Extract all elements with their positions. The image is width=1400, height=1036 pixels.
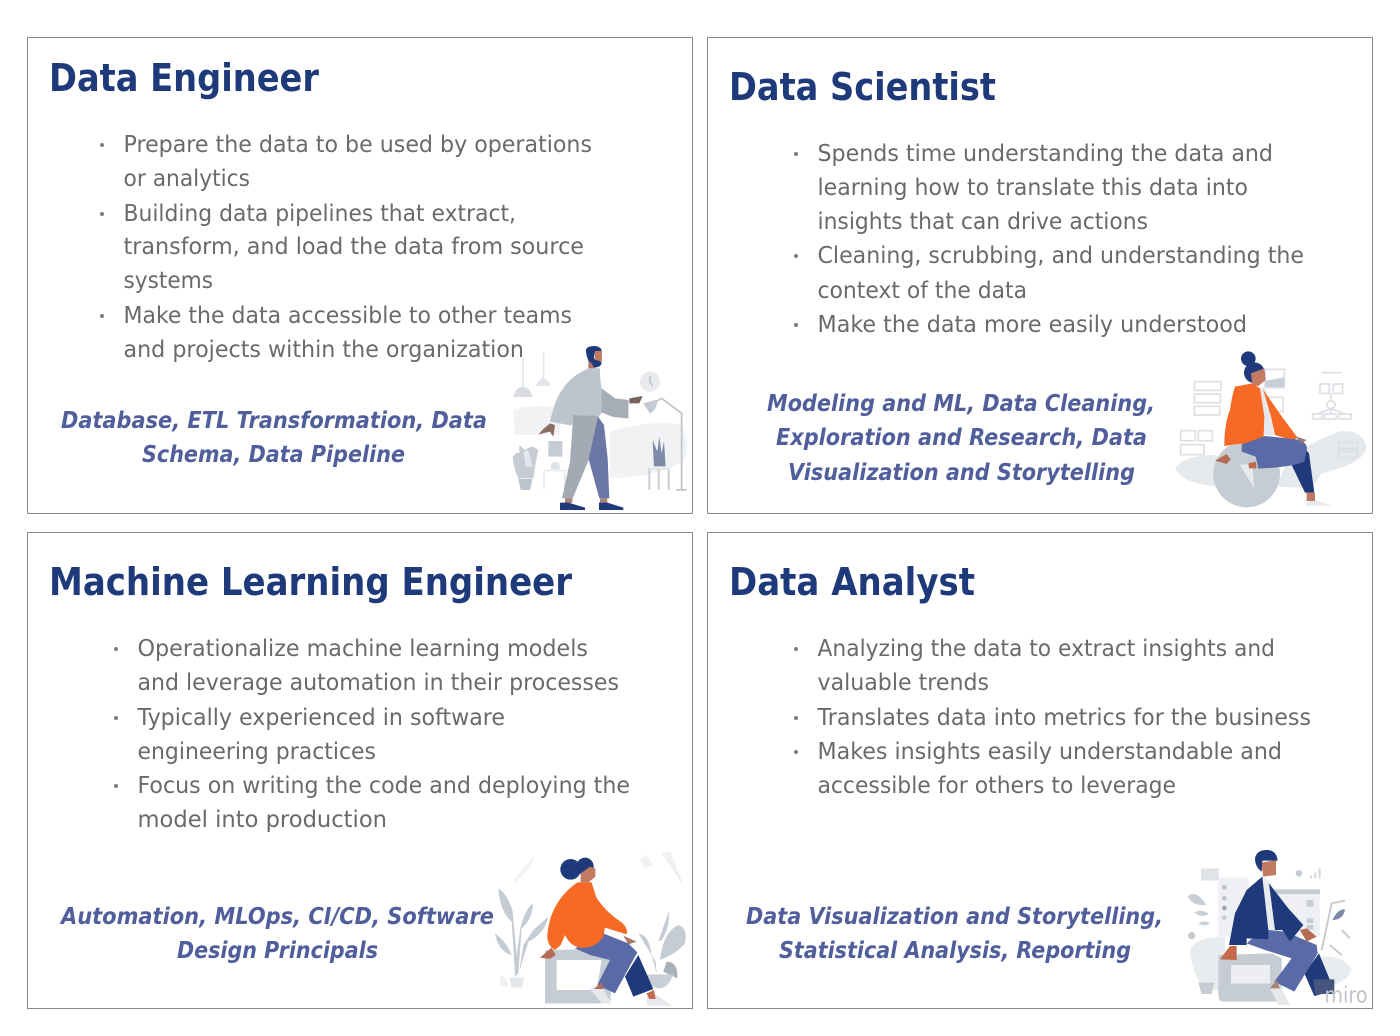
skills: Data Engineer — [61, 408, 487, 468]
bullet list: Data Engineer duties: or analytics — [124, 166, 250, 192]
skills: Data Engineer: Database, ETL Transformation, Data — [61, 408, 487, 434]
bullet list: ML Engineer duties: Focus on writing the code and deploying the — [138, 773, 630, 799]
bullet list: Data Analyst duties: accessible for others to leverage — [818, 773, 1176, 799]
bullet list: Data Scientist duties: learning how to translate this data into — [818, 175, 1248, 201]
bullet list: Data Engineer duties: Make the data accessible to other teams — [124, 303, 572, 329]
heading: Data Scientist: Data Scientist — [729, 65, 996, 109]
bullet list: Data Analyst duties: Makes insights easily understandable and — [818, 739, 1282, 765]
bullet list: Data Engineer duties — [100, 132, 592, 363]
bullet list: Data Analyst duties: Analyzing the data to extract insights and — [818, 636, 1275, 662]
skills: ML Engineer: Design Principals — [177, 938, 378, 964]
illustration: man seated with dashboard and plants — [1188, 850, 1368, 1008]
bullet list: Data Scientist duties: Make the data more easily understood — [818, 312, 1247, 338]
skills: Data Engineer: Schema, Data Pipeline — [142, 442, 405, 468]
bullet list: ML Engineer duties: and leverage automation in their processes — [138, 670, 619, 696]
bullet list: Data Engineer duties: Prepare the data to be used by operations — [124, 132, 592, 158]
watermark: miro: miro — [1324, 983, 1368, 1008]
panel: Data Scientist — [708, 38, 1372, 514]
panel: Data Analyst — [708, 532, 1372, 1008]
illustration: woman on exercise ball — [1175, 351, 1367, 507]
bullet list: Data Scientist duties: insights that can drive actions — [818, 209, 1148, 235]
bullet list: ML Engineer duties — [114, 636, 630, 833]
heading: Data Engineer: Data Engineer — [49, 56, 319, 100]
bullet list: ML Engineer duties: model into production — [138, 807, 387, 833]
bullet list: Data Engineer duties: Building data pipelines that extract, — [124, 201, 516, 227]
heading: Data Analyst: Data Analyst — [729, 560, 975, 604]
skills: ML Engineer — [59, 904, 494, 964]
bullet list: Data Analyst duties: valuable trends — [818, 670, 989, 696]
bullet list: Data Scientist duties: context of the data — [818, 278, 1027, 304]
bullet list: Data Scientist duties: Cleaning, scrubbing, and understanding the — [818, 243, 1304, 269]
heading: Machine Learning Engineer: Machine Learning Engineer — [49, 560, 572, 604]
skills: Data Analyst: Statistical Analysis, Reporting — [779, 938, 1131, 964]
bullet list: Data Scientist duties — [794, 141, 1304, 338]
bullet list: Data Engineer duties: transform, and load the data from source — [124, 234, 584, 260]
skills: Data Scientist: Visualization and Storytelling — [788, 460, 1135, 486]
illustration: woman seated on a box with plants — [495, 852, 686, 1006]
panel: Machine Learning Engineer — [28, 532, 692, 1008]
panel: Data Engineer — [28, 38, 692, 514]
bullet list: ML Engineer duties: Typically experienced in software — [137, 705, 505, 731]
skills: Data Scientist — [767, 391, 1155, 486]
bullet list: Data Engineer duties: systems — [124, 268, 213, 294]
bullet list: ML Engineer duties: Operationalize machine learning models — [138, 636, 588, 662]
bullet list: ML Engineer duties: engineering practices — [138, 739, 376, 765]
skills: Data Analyst: Data Visualization and Storytelling, — [746, 904, 1163, 930]
bullet list: Data Engineer duties: and projects within the organization — [124, 337, 524, 363]
bullet list: Data Analyst duties — [794, 636, 1311, 799]
skills: Data Scientist: Modeling and ML, Data Cleaning, — [767, 391, 1155, 417]
skills: Data Analyst — [746, 904, 1163, 964]
bullet list: Data Scientist duties: Spends time understanding the data and — [818, 141, 1273, 167]
skills: Data Scientist: Exploration and Research, Data — [776, 425, 1147, 451]
illustration: man walking toward lamp — [513, 346, 687, 510]
bullet list: Data Analyst duties: Translates data into metrics for the business — [817, 705, 1311, 731]
skills: ML Engineer: Automation, MLOps, CI/CD, Software — [59, 904, 494, 930]
